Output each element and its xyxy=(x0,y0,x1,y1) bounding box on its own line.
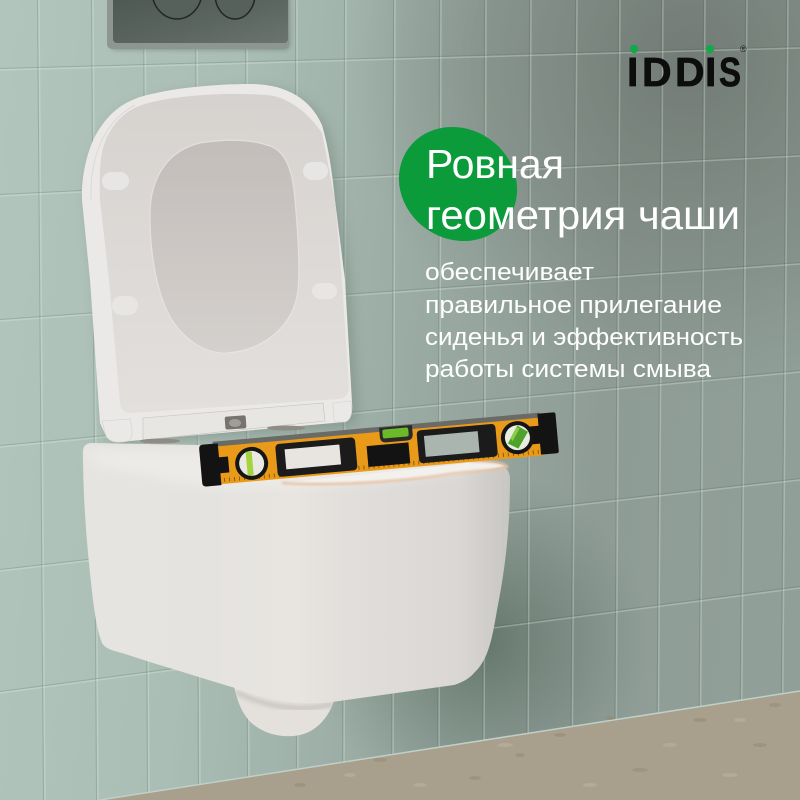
seat bumper top right xyxy=(303,162,328,180)
right hinge end xyxy=(333,401,352,422)
seat opening xyxy=(150,140,299,353)
IDDIS logo: I xyxy=(705,49,716,95)
heading xyxy=(426,141,740,238)
green circle accent xyxy=(376,104,540,264)
hinge post left xyxy=(140,438,180,444)
hinge post right xyxy=(267,426,305,430)
flush button left xyxy=(152,0,202,19)
left end cap xyxy=(199,443,230,487)
left handle window xyxy=(275,437,358,477)
level top strip xyxy=(213,413,540,448)
IDDIS logo: D xyxy=(675,49,705,95)
description text xyxy=(425,259,743,383)
description text: работы системы смыва xyxy=(425,356,712,383)
seat edge layers xyxy=(91,105,135,200)
description text: обеспечивает xyxy=(425,259,594,286)
toilet seat lid xyxy=(82,84,357,446)
heading: геометрия чаши xyxy=(426,192,740,238)
description text: правильное прилегание xyxy=(425,292,722,319)
description text: сиденья и эффективность xyxy=(425,324,743,351)
left vial window xyxy=(234,445,270,481)
right vial window xyxy=(500,420,535,456)
flush button right xyxy=(215,0,255,19)
right handle window xyxy=(416,424,498,463)
spirit level xyxy=(199,411,559,487)
IDDIS logo: D xyxy=(642,49,672,95)
stone floor xyxy=(100,691,800,800)
logo dot right xyxy=(706,45,714,53)
registered mark: ® xyxy=(740,44,747,54)
drain shadow under bowl xyxy=(236,692,333,708)
seat bumper top left xyxy=(102,172,129,190)
hinge bar xyxy=(143,403,325,440)
centre black panel xyxy=(367,442,410,467)
bowl opening highlight xyxy=(283,462,505,484)
bowl rim peach reflection xyxy=(283,461,507,484)
left hinge end xyxy=(102,419,132,442)
bowl deck highlight xyxy=(90,450,480,488)
flush plate xyxy=(107,0,290,50)
drain pipe xyxy=(234,686,334,736)
seat outer shell xyxy=(82,84,352,442)
seat bumper bottom right xyxy=(312,283,337,299)
toilet bowl xyxy=(83,426,510,703)
heading: Ровная xyxy=(426,141,564,187)
level ruler ticks xyxy=(224,452,539,480)
logo dot left xyxy=(630,45,638,53)
level orange body xyxy=(213,418,543,485)
IDDIS logo xyxy=(627,44,747,95)
IDDIS logo: I xyxy=(627,49,638,95)
hinge clip xyxy=(225,415,246,430)
seat inner surface xyxy=(100,94,349,413)
logo letter S: S xyxy=(719,49,741,95)
seat bumper bottom left xyxy=(112,296,138,315)
top bubble vial xyxy=(379,425,413,443)
right end cap xyxy=(527,412,559,456)
